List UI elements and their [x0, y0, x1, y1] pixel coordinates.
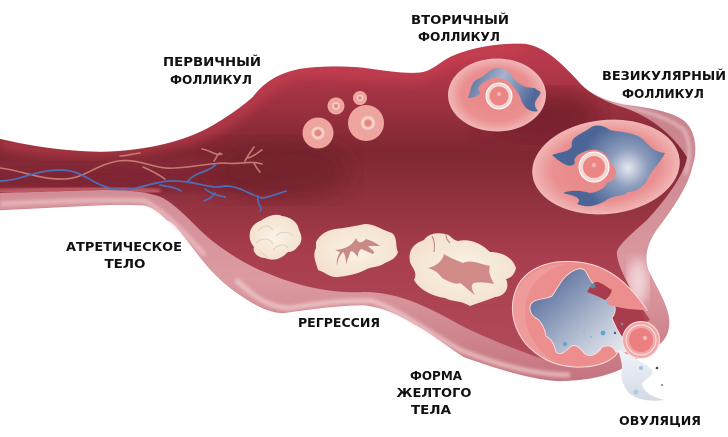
- antrum cavity: [552, 126, 665, 206]
- label: corpus luteum formation: [396, 368, 472, 417]
- released oocyte: [622, 322, 660, 358]
- corpus luteum forming: [410, 233, 516, 306]
- atretic body: [250, 215, 301, 260]
- secondary follicle: [448, 58, 546, 132]
- label: secondary follicle: ВТОРИЧНЫЙ: [411, 12, 509, 27]
- label: primary follicle: ПЕРВИЧНЫЙ: [163, 54, 261, 69]
- released fluid: [563, 284, 666, 401]
- label: primary follicle: [163, 54, 261, 87]
- primary follicles: [302, 91, 384, 148]
- rupturing follicle: [512, 261, 650, 367]
- vein: blue vessel: [0, 164, 286, 211]
- vesicular follicle: [527, 113, 685, 221]
- artery: pink vessel: [0, 147, 262, 179]
- label: vesicular follicle: ВЕЗИКУЛЯРНЫЙ: [602, 68, 726, 83]
- follicle cavity: [468, 68, 540, 111]
- ovary body: [0, 40, 700, 380]
- label: atretic body: [66, 239, 182, 271]
- label: atretic body: АТРЕТИЧЕСКОЕ: [66, 239, 182, 254]
- label: atretic body: ТЕЛО: [104, 256, 146, 271]
- label: corpus luteum formation: ЖЕЛТОГО: [396, 385, 472, 400]
- label: secondary follicle: ФОЛЛИКУЛ: [418, 29, 500, 44]
- label: ovulation: ОВУЛЯЦИЯ: [619, 413, 701, 428]
- label: regression: РЕГРЕССИЯ: [298, 315, 380, 330]
- label: primary follicle: ФОЛЛИКУЛ: [170, 72, 252, 87]
- label: secondary follicle: [411, 12, 509, 44]
- ruptured cavity with fluid: [530, 269, 626, 356]
- label: vesicular follicle: ФОЛЛИКУЛ: [622, 86, 704, 101]
- ovary outer wall: [0, 44, 695, 381]
- label: corpus luteum formation: ТЕЛА: [411, 402, 451, 417]
- regressing corpus luteum: [314, 224, 398, 277]
- blood vessels: [0, 147, 286, 211]
- label: vesicular follicle: [602, 68, 726, 101]
- label: corpus luteum formation: ФОРМА: [410, 368, 462, 383]
